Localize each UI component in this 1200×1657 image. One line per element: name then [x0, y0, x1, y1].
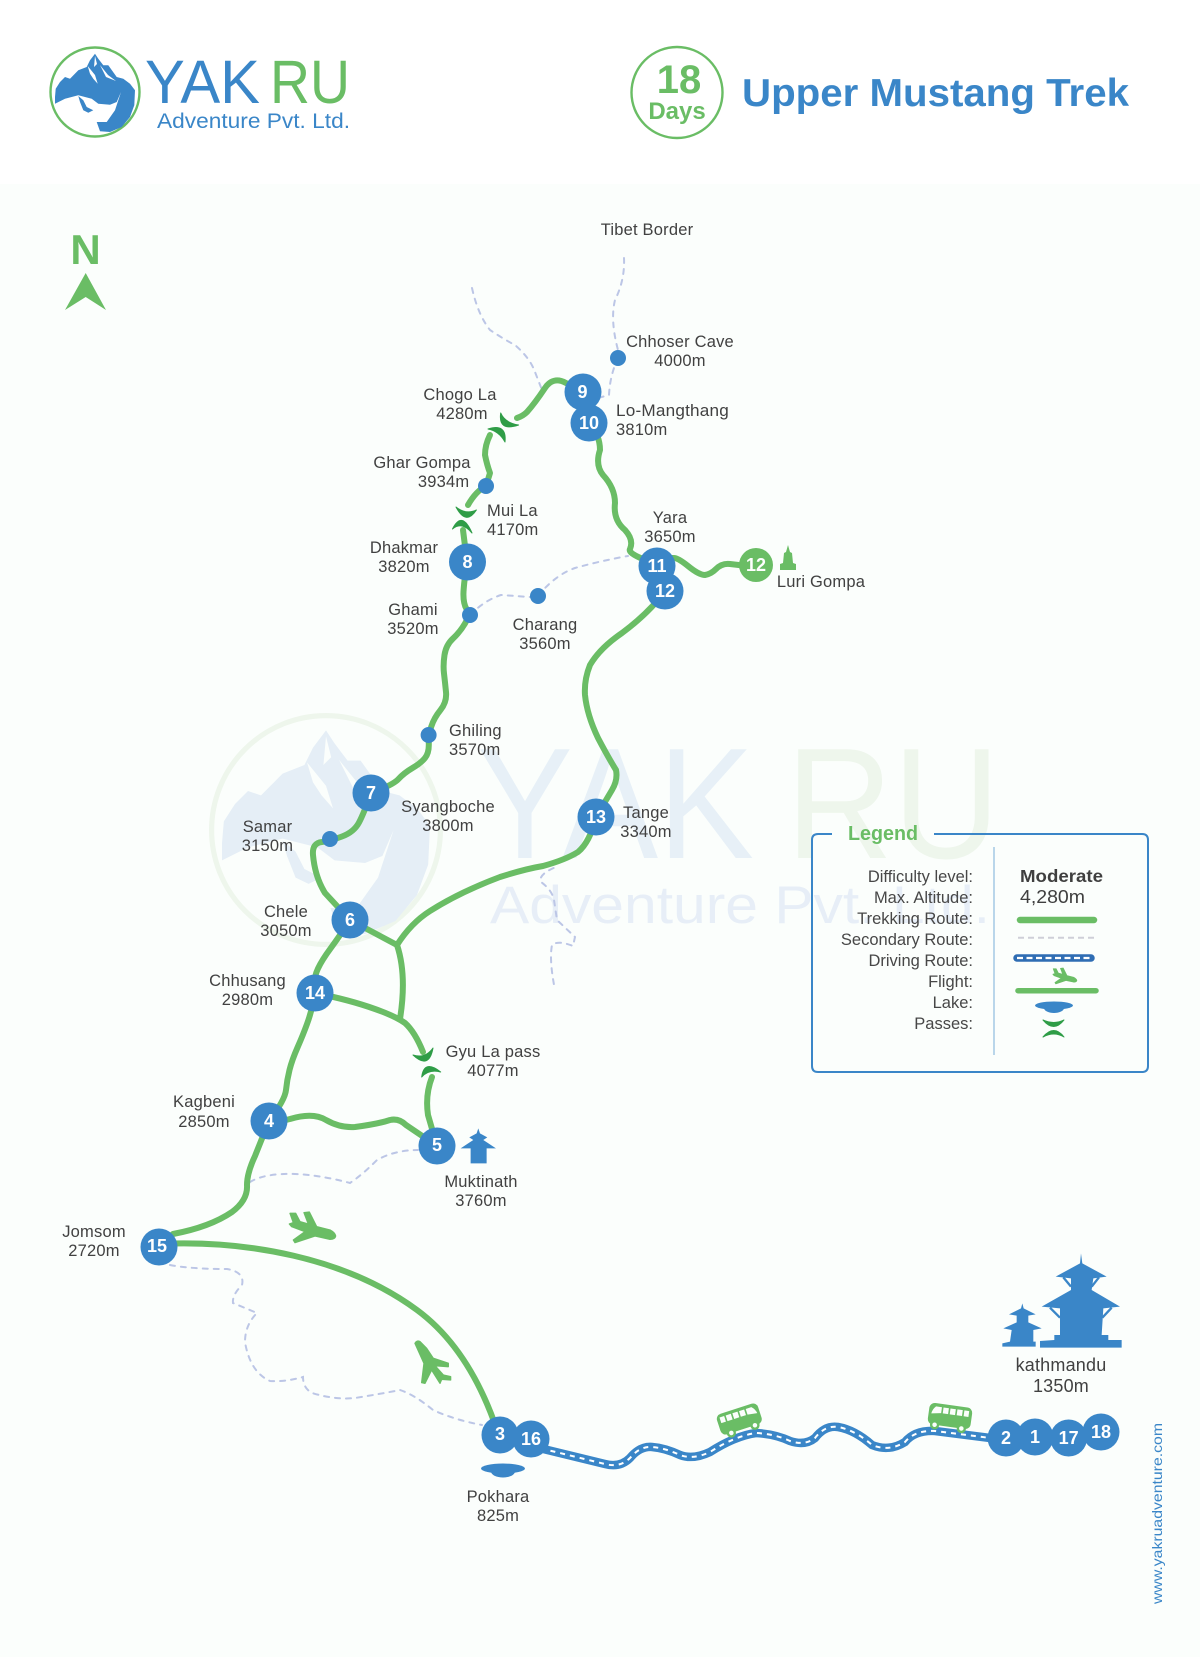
- legend labels: Max. Altitude:: [874, 889, 973, 907]
- marker 2: 2: [1001, 1428, 1011, 1448]
- legend labels: Passes:: [914, 1015, 973, 1033]
- legend labels: Lake:: [933, 994, 973, 1012]
- label: Chhoser Cave: Chhoser Cave: [626, 333, 734, 351]
- legend trekking swatch: [1020, 917, 1094, 923]
- label: Muktinath: Muktinath: [444, 1173, 518, 1191]
- company logo: RU: [270, 48, 350, 116]
- marker 16: 16: [521, 1429, 541, 1449]
- marker 12 Luri Gompa: [739, 548, 773, 582]
- label: kathmandu: kathmandu: [1016, 1355, 1106, 1375]
- label: Syangboche: Syangboche: [401, 798, 495, 816]
- icon: pass Mui La: [452, 507, 476, 533]
- watermark logo: YAK: [477, 716, 754, 892]
- legend flight swatch: [1018, 988, 1096, 993]
- north arrow: N: [70, 226, 101, 273]
- label: Charang: 3560m: [519, 635, 571, 653]
- marker 6: [332, 902, 368, 938]
- marker 18: [1082, 1414, 1120, 1450]
- label: Ghiling: Ghiling: [449, 722, 502, 740]
- days badge: Days: [648, 98, 706, 125]
- panel: legend: [812, 823, 1148, 1072]
- label: Jomsom: Jomsom: [62, 1223, 126, 1241]
- marker 4: [250, 1102, 288, 1140]
- label: Charang: Charang: [513, 616, 577, 634]
- marker 11: 11: [647, 556, 667, 576]
- marker 1: 1: [1030, 1427, 1040, 1447]
- legend divider: [993, 847, 995, 1055]
- north arrow: [65, 226, 106, 310]
- marker 15: [140, 1228, 178, 1266]
- marker 13: 13: [586, 807, 606, 827]
- marker 7: 7: [366, 783, 376, 803]
- label: Chhusang: 2980m: [222, 991, 273, 1009]
- marker 12 Luri Gompa: 12: [746, 555, 766, 575]
- marker 17: [1050, 1420, 1087, 1456]
- label: kathmandu: 1350m: [1033, 1376, 1089, 1396]
- label: Chhoser Cave: 4000m: [654, 352, 706, 370]
- marker 15: 15: [147, 1236, 167, 1256]
- label: Ghar Gompa: 3934m: [418, 473, 469, 491]
- marker 4: 4: [264, 1111, 274, 1131]
- marker 7: [352, 774, 390, 812]
- legend altitude value: 4,280m: [1020, 887, 1085, 907]
- label: Chhusang: Chhusang: [209, 972, 286, 990]
- legend heading: Legend: [848, 823, 918, 845]
- icon: Kathmandu temples: [1002, 1253, 1122, 1348]
- legend secondary swatch: [1018, 937, 1095, 939]
- legend pass swatch: [1043, 1020, 1064, 1037]
- logo wordmark: YAK: [145, 48, 260, 116]
- watermark logo: RU: [786, 716, 1000, 892]
- icon: plane to Jomsom: [289, 1212, 336, 1243]
- marker 3: [482, 1416, 518, 1454]
- label: Lo-Mangthang: 3810m: [616, 421, 667, 439]
- label: Gyu La pass: 4077m: [467, 1062, 519, 1080]
- marker 9: [564, 374, 602, 410]
- marker 2: [988, 1420, 1024, 1456]
- marker 13: [578, 798, 614, 836]
- secondary routes: [170, 258, 628, 1425]
- legend labels: [841, 868, 973, 1033]
- label: Chele: Chele: [264, 903, 308, 921]
- label: Samar: Samar: [243, 818, 293, 836]
- icon: pass Chogo La: [488, 413, 519, 442]
- marker 10: [570, 404, 608, 442]
- icon: Muktinath temple: [461, 1128, 496, 1163]
- marker 1: [1016, 1418, 1054, 1456]
- watermark logo: Adventure Pvt. Ltd.: [490, 876, 990, 935]
- label: Samar: 3150m: [242, 837, 293, 855]
- legend driving swatch: [1017, 954, 1091, 962]
- icon: plane to Pokhara: [415, 1341, 451, 1383]
- label: Pokhara: Pokhara: [467, 1488, 530, 1506]
- marker 9: 9: [577, 382, 588, 402]
- website url: www.yakruadventure.com: [1149, 1423, 1165, 1605]
- title: Upper Mustang Trek: [742, 72, 1129, 115]
- label: Chogo La: 4280m: [436, 405, 488, 423]
- company logo: [50, 48, 350, 136]
- marker 8: 8: [462, 552, 473, 572]
- marker 16: [512, 1420, 550, 1458]
- icon: Pokhara lake: [481, 1464, 525, 1478]
- label: Chele: 3050m: [260, 922, 312, 940]
- label: Muktinath: 3760m: [455, 1192, 507, 1210]
- label: Syangboche: 3800m: [422, 817, 474, 835]
- legend labels: Difficulty level:: [868, 868, 973, 886]
- label: Tibet Border: Tibet Border: [601, 221, 694, 239]
- legend difficulty value: Moderate: [1020, 866, 1103, 886]
- small place dots: [322, 350, 626, 847]
- label: Kagbeni: Kagbeni: [173, 1093, 235, 1111]
- watermark logo: [212, 716, 1000, 944]
- label: Ghami: Ghami: [388, 601, 438, 619]
- marker 8: [449, 544, 486, 580]
- label: Yara: 3650m: [644, 528, 696, 546]
- label: Tange: Tange: [623, 804, 669, 822]
- marker 18: 18: [1091, 1422, 1111, 1442]
- legend labels: Driving Route:: [868, 952, 973, 970]
- label: Tange: 3340m: [620, 823, 672, 841]
- legend frame: [812, 834, 1148, 1072]
- label: Pokhara: 825m: [477, 1507, 519, 1525]
- marker 12: [646, 572, 684, 610]
- marker 11: [638, 548, 676, 584]
- day markers: [140, 374, 1120, 1458]
- icon: pass Gyu La: [413, 1048, 441, 1077]
- icon: bus two: [927, 1402, 973, 1433]
- marker 5: 5: [432, 1135, 442, 1155]
- label: Chogo La: Chogo La: [423, 386, 497, 404]
- marker 3: 3: [495, 1424, 505, 1444]
- company logo: Adventure Pvt. Ltd.: [157, 110, 350, 133]
- label: Dhakmar: Dhakmar: [370, 539, 438, 557]
- label: Gyu La pass: Gyu La pass: [446, 1043, 540, 1061]
- legend labels: Trekking Route:: [857, 910, 973, 928]
- marker 14: 14: [305, 983, 325, 1003]
- days badge: 18: [657, 58, 701, 102]
- label: Ghiling: 3570m: [449, 741, 500, 759]
- marker 10: 10: [579, 413, 599, 433]
- label: Mui La: 4170m: [487, 521, 538, 539]
- label: Ghami: 3520m: [387, 620, 439, 638]
- label: Mui La: Mui La: [487, 502, 538, 520]
- driving route: [531, 1427, 1006, 1465]
- legend labels: Secondary Route:: [841, 931, 973, 949]
- trekking routes: [159, 380, 756, 1245]
- marker 6: 6: [345, 910, 355, 930]
- flight route: [159, 1243, 497, 1430]
- legend flight plane: [1053, 968, 1077, 984]
- label: Jomsom: 2720m: [68, 1242, 120, 1260]
- marker 14: [296, 974, 334, 1012]
- label: Kagbeni: 2850m: [178, 1113, 230, 1131]
- label: Ghar Gompa: Ghar Gompa: [373, 454, 471, 472]
- label: Lo-Mangthang: Lo-Mangthang: [616, 402, 729, 420]
- label: Dhakmar: 3820m: [378, 558, 430, 576]
- label: Luri Gompa: Luri Gompa: [777, 573, 866, 591]
- label: Yara: Yara: [653, 509, 688, 527]
- marker 17: 17: [1059, 1428, 1079, 1448]
- icon: Luri Gompa stupa: [780, 545, 796, 570]
- icon: bus one: [715, 1402, 764, 1439]
- marker 12: 12: [655, 581, 675, 601]
- legend lake swatch: [1035, 1002, 1073, 1013]
- days badge: [632, 47, 722, 138]
- legend labels: Flight:: [928, 973, 973, 991]
- logo emblem: [50, 48, 140, 136]
- marker 5: [418, 1128, 456, 1164]
